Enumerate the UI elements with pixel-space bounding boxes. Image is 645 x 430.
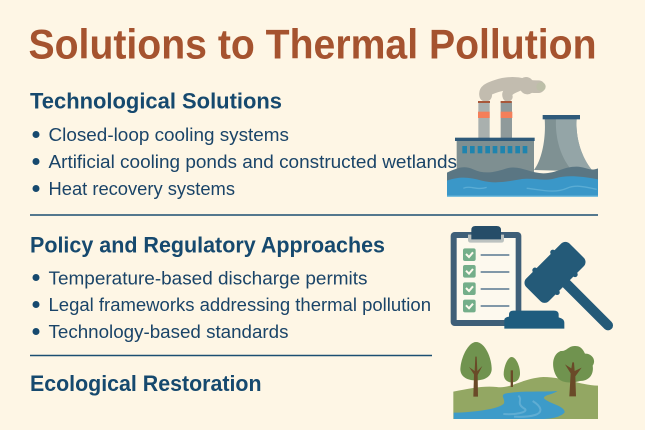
heading: policy and regulatory approaches: Policy and Regulatory Approaches — [30, 232, 385, 258]
title: Solutions to Thermal Pollution — [28, 20, 596, 68]
heading: ecological restoration: Ecological Restoration — [30, 371, 262, 396]
bullet list: policy: Legal frameworks addressing thermal pollution — [48, 294, 431, 315]
bullet list: technological solutions — [32, 124, 457, 199]
panel: policy and regulatory approaches — [30, 232, 431, 342]
icon: power plant — [447, 82, 598, 197]
bullet list: technological solutions: Closed-loop cooling systems — [48, 124, 289, 145]
bullet list: technological solutions: Heat recovery systems — [48, 178, 235, 199]
tree: large — [460, 342, 492, 397]
icon: landscape with trees and river — [453, 342, 598, 419]
heading: technological solutions: Technological Solutions — [30, 88, 282, 114]
bullet list: policy: Temperature-based discharge permits — [48, 268, 368, 288]
gavel — [504, 238, 633, 351]
icon: clipboard checklist — [451, 226, 633, 351]
tree: small — [504, 357, 520, 387]
panel: technological solutions — [30, 88, 457, 199]
tree: bushy — [553, 346, 594, 396]
bullet list: policy — [32, 268, 431, 342]
bullet list: policy: Technology-based standards — [48, 321, 288, 342]
bullet list: technological solutions: Artificial cooling ponds and constructed wetlands — [48, 151, 457, 172]
